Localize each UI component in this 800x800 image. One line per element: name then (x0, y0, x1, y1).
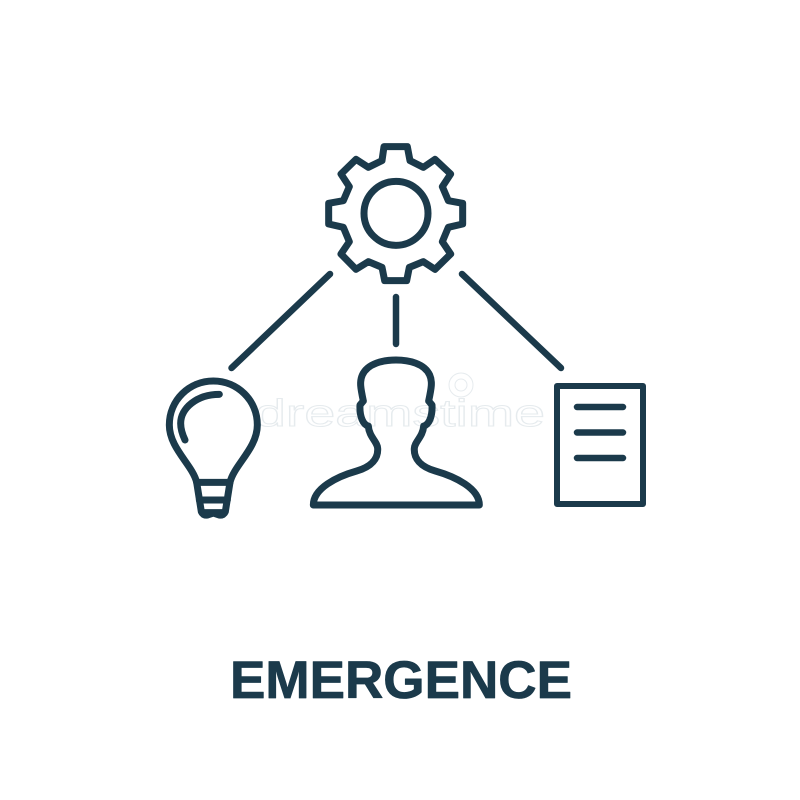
connector: gear to person (393, 297, 399, 344)
icon: person silhouette (313, 360, 479, 505)
title: EMERGENCE (230, 651, 572, 710)
icon: gear (329, 147, 463, 281)
connector: gear to bulb (232, 274, 330, 368)
watermark (255, 373, 545, 435)
connector: gear to document (462, 274, 561, 368)
icon: light bulb (169, 381, 257, 515)
icon: document (557, 386, 643, 504)
watermark: dreamstime (255, 393, 545, 435)
